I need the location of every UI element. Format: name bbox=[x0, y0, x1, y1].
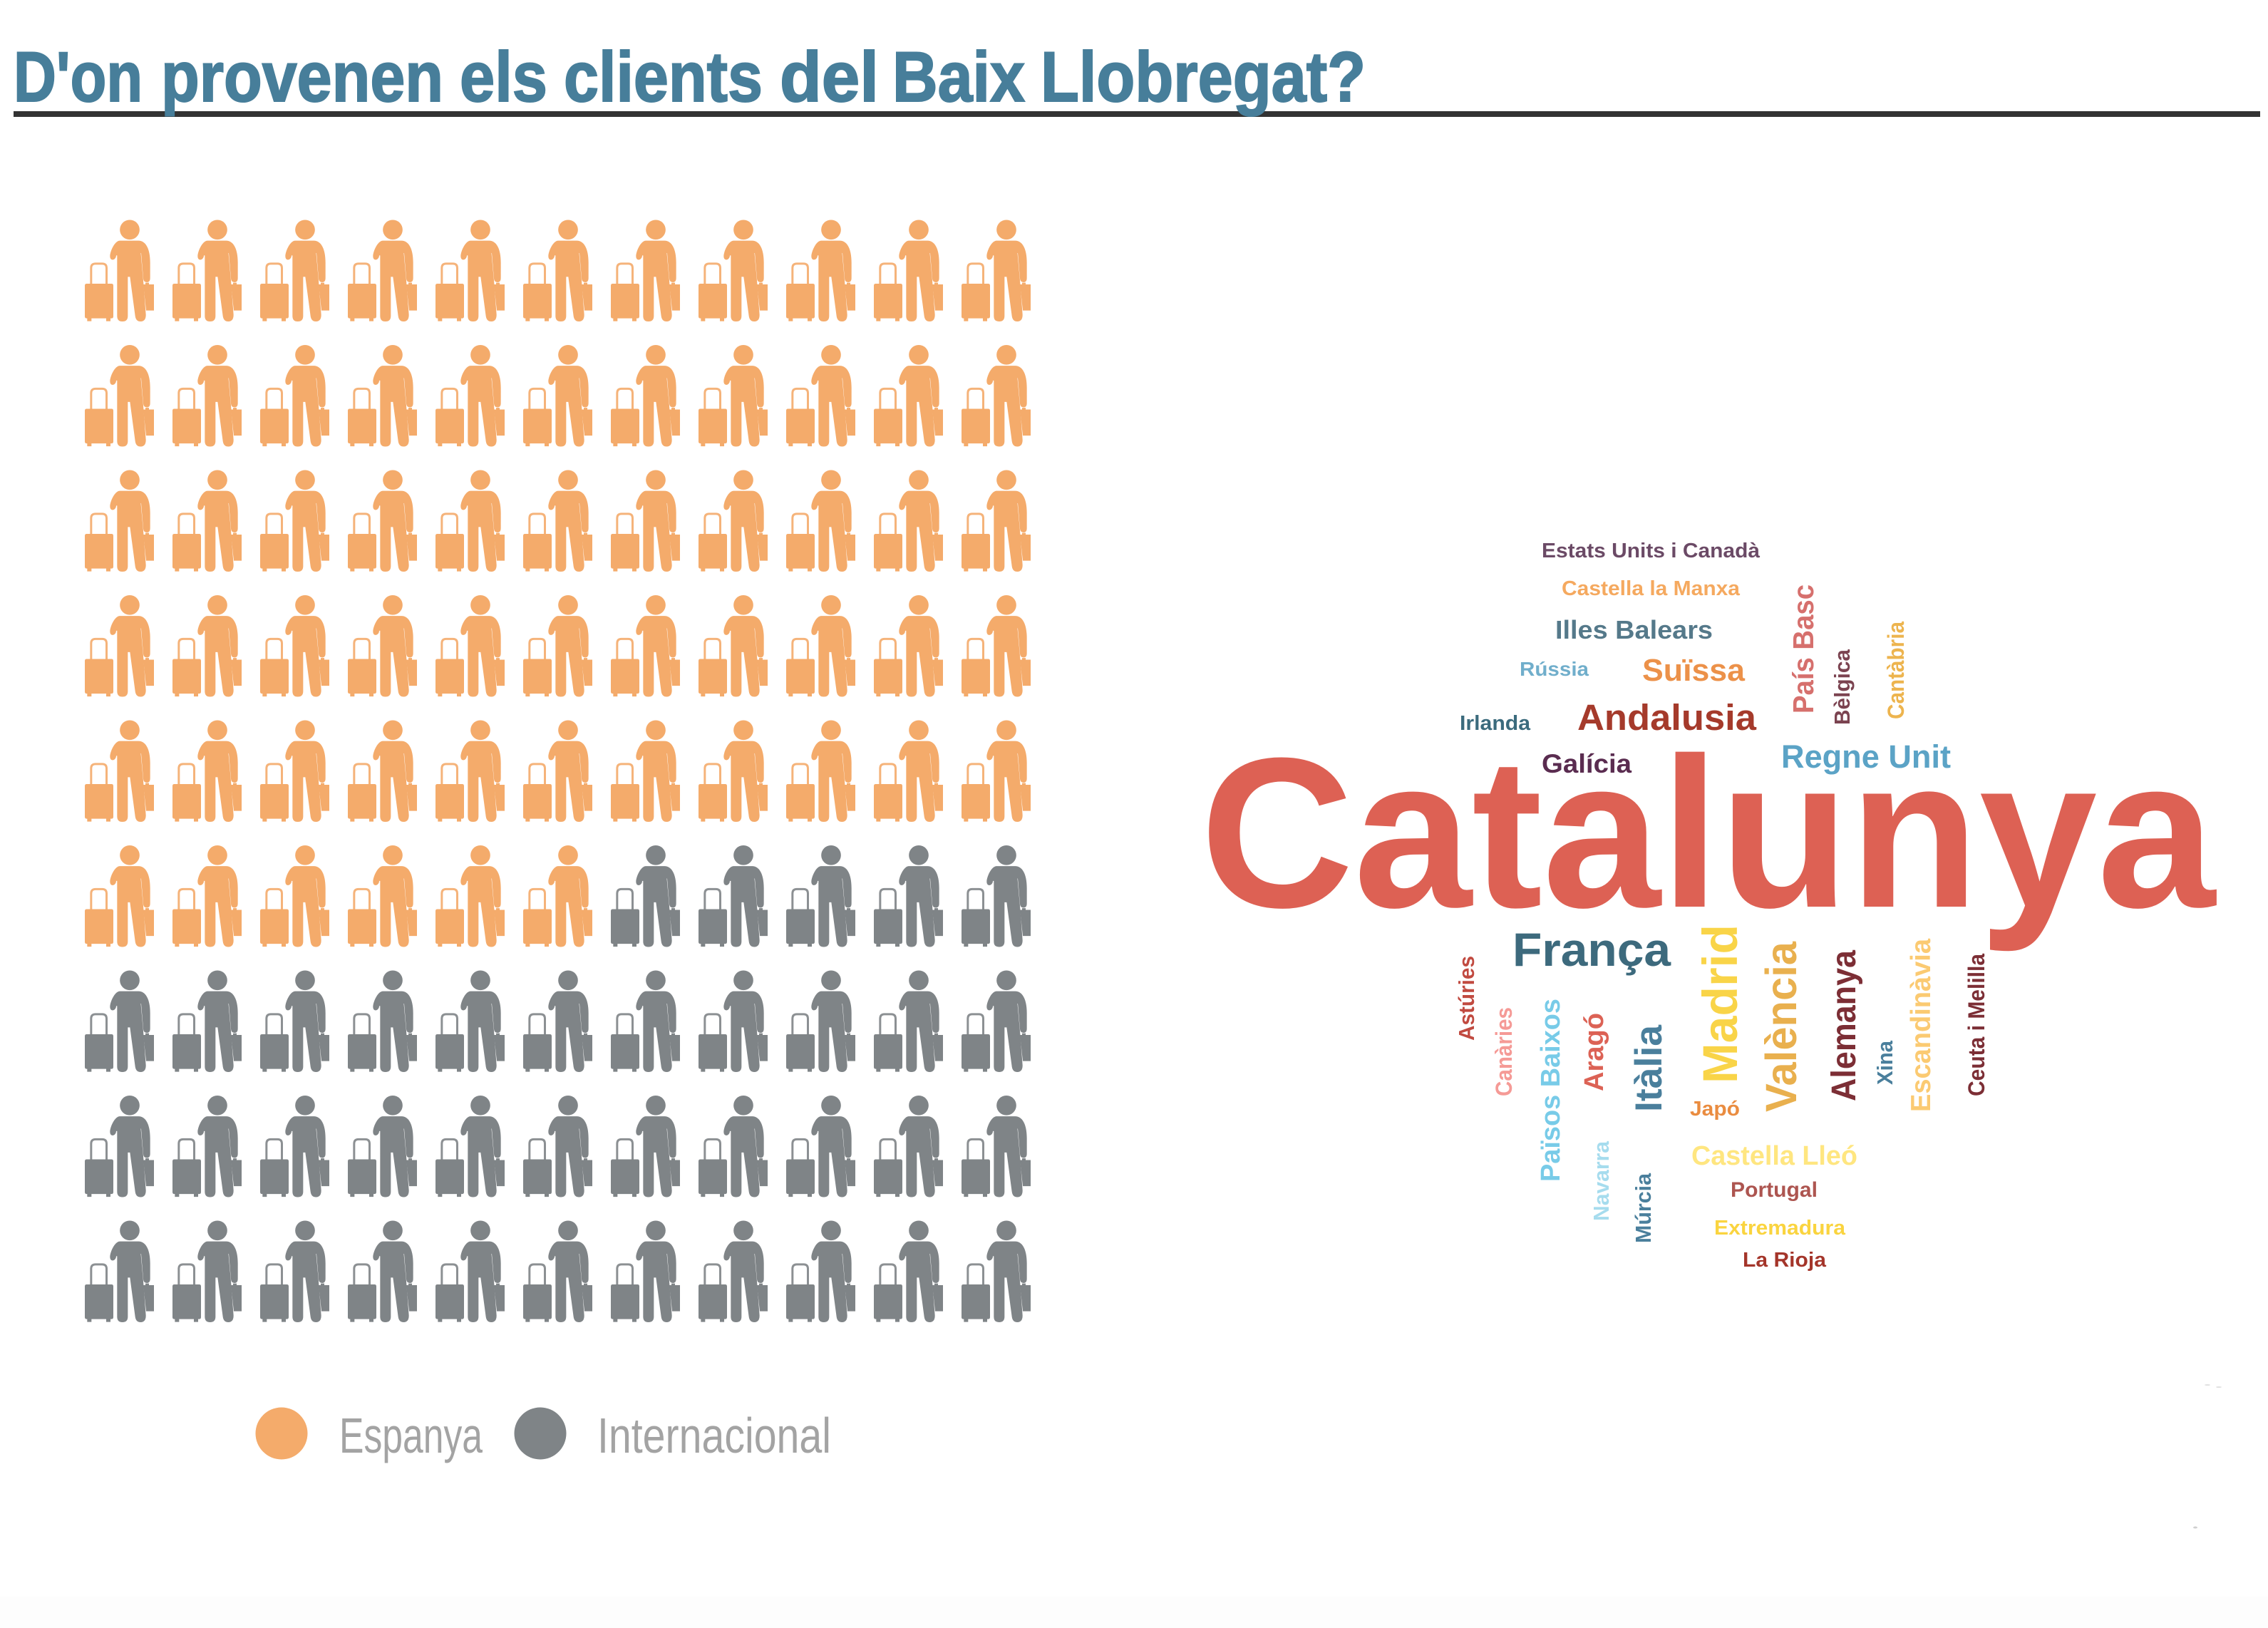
title: D'on bbox=[14, 37, 143, 116]
legend label: Internacional: Internacional bbox=[597, 1408, 831, 1463]
title: clients bbox=[564, 37, 763, 116]
word: Múrcia: Múrcia bbox=[1631, 1173, 1656, 1243]
icons: Internacional travellers bbox=[85, 845, 1031, 1322]
word: Illes Balears: Illes Balears bbox=[1555, 615, 1713, 644]
legend swatch: Espanya bbox=[255, 1407, 308, 1460]
word: Astúries: Astúries bbox=[1454, 956, 1479, 1041]
word: Andalusia: Andalusia bbox=[1577, 697, 1757, 738]
word: Cantàbria: Cantàbria bbox=[1883, 622, 1909, 719]
word: Madrid: Madrid bbox=[1693, 924, 1748, 1083]
word: Bèlgica: Bèlgica bbox=[1830, 649, 1855, 725]
title: Llobregat? bbox=[1041, 37, 1366, 116]
word: Regne Unit: Regne Unit bbox=[1781, 738, 1951, 775]
title: del bbox=[780, 37, 879, 116]
title rule bbox=[14, 111, 2260, 117]
word: Aragó: Aragó bbox=[1579, 1013, 1609, 1091]
word: Suïssa: Suïssa bbox=[1642, 653, 1746, 688]
pictogram chart: 61 Espanya, 38 Internacional bbox=[85, 220, 1031, 1322]
word: Portugal: Portugal bbox=[1731, 1178, 1818, 1202]
word: Japó: Japó bbox=[1690, 1098, 1740, 1120]
legend label: Espanya: Espanya bbox=[339, 1408, 483, 1463]
word: Xina: Xina bbox=[1872, 1040, 1897, 1085]
word: Canàries: Canàries bbox=[1491, 1007, 1517, 1096]
word: La Rioja: La Rioja bbox=[1743, 1249, 1827, 1272]
word: Alemanya: Alemanya bbox=[1825, 950, 1863, 1101]
word: Extremadura: Extremadura bbox=[1714, 1217, 1846, 1240]
word: Galícia: Galícia bbox=[1542, 749, 1632, 778]
word: Catalunya: Catalunya bbox=[1200, 713, 2217, 954]
word: Itàlia: Itàlia bbox=[1628, 1024, 1670, 1112]
word: Països Baixos: Països Baixos bbox=[1536, 999, 1566, 1182]
word: França: França bbox=[1512, 923, 1671, 976]
word: Irlanda: Irlanda bbox=[1460, 712, 1531, 735]
word: Escandinàvia: Escandinàvia bbox=[1906, 939, 1937, 1112]
word: Rússia: Rússia bbox=[1520, 658, 1589, 680]
legend swatch: Internacional bbox=[515, 1407, 566, 1460]
word: Estats Units i Canadà: Estats Units i Canadà bbox=[1542, 540, 1761, 562]
word: Castella Lleó: Castella Lleó bbox=[1691, 1141, 1857, 1171]
legend bbox=[255, 1407, 831, 1463]
title bbox=[14, 37, 1366, 116]
icons: Espanya travellers bbox=[85, 220, 1031, 947]
word: València: València bbox=[1757, 941, 1805, 1112]
word: Castella la Manxa: Castella la Manxa bbox=[1562, 577, 1741, 600]
word cloud bbox=[1200, 540, 2217, 1272]
word: País Basc: País Basc bbox=[1787, 584, 1820, 713]
word: Ceuta i Melilla: Ceuta i Melilla bbox=[1964, 954, 1989, 1096]
title: Baix bbox=[892, 37, 1025, 116]
word: Navarra: Navarra bbox=[1589, 1140, 1614, 1221]
title: provenen bbox=[161, 37, 443, 116]
title: els bbox=[460, 37, 547, 116]
